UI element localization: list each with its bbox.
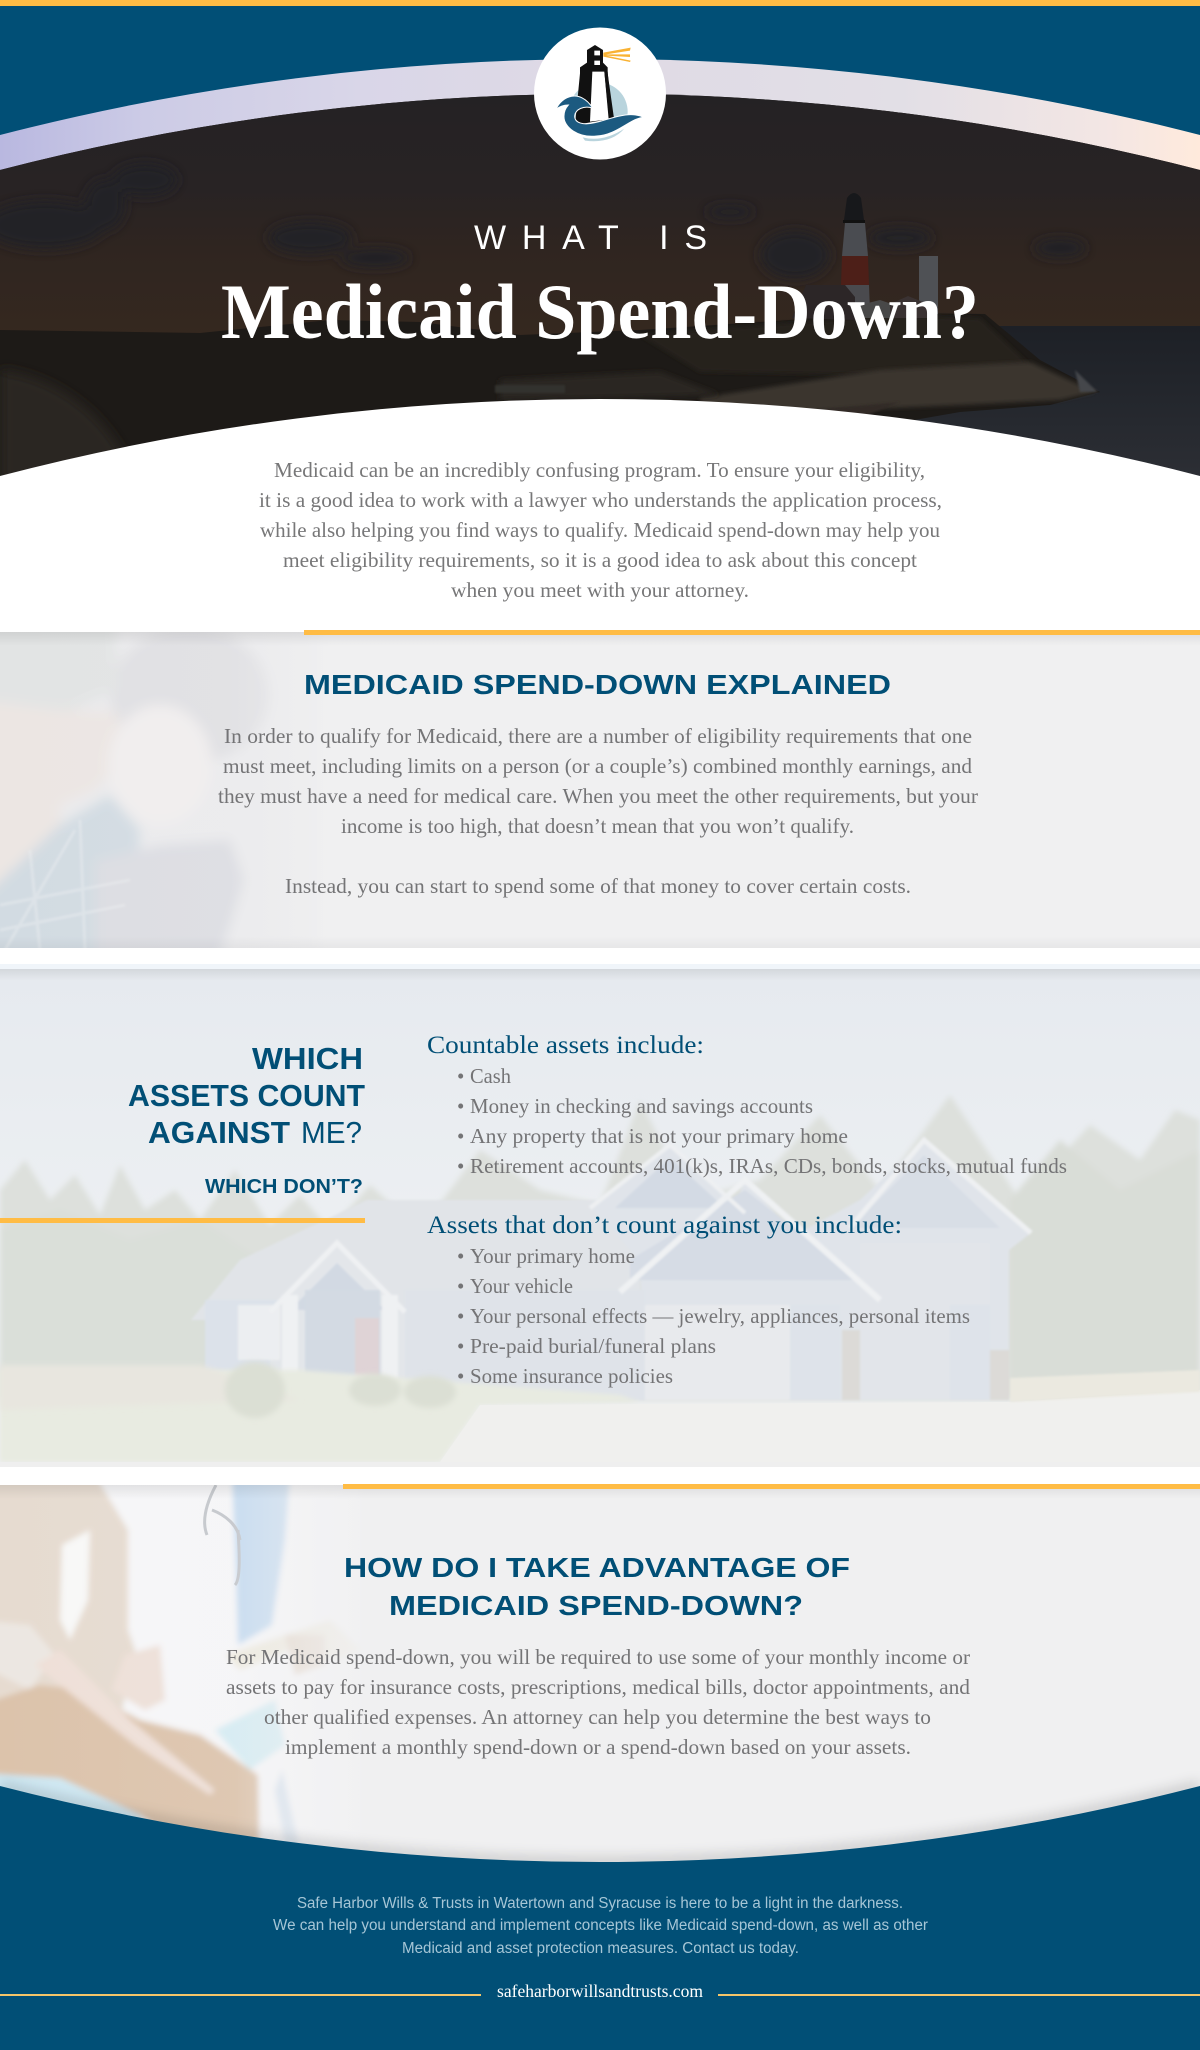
heading: which assets count: ASSETS COUNT xyxy=(128,1078,365,1113)
shrubs xyxy=(225,1362,456,1418)
list: countable assets: Any property that is not your primary home xyxy=(470,1124,848,1148)
kicker: what is: WHAT IS xyxy=(474,219,707,257)
panel: how to take advantage xyxy=(0,1475,1200,1895)
closing text: Medicaid and asset protection measures. Contact us today. xyxy=(402,1940,799,1957)
body text: other qualified expenses. An attorney can help you determine the best ways to xyxy=(264,1705,931,1729)
main title: Medicaid Spend-Down? xyxy=(221,268,979,355)
body text xyxy=(226,1645,971,1759)
heading xyxy=(344,1552,850,1621)
sea xyxy=(915,326,1200,476)
heading: MEDICAID SPEND-DOWN? xyxy=(389,1590,803,1621)
stethoscope xyxy=(205,1485,240,1585)
header photo: lighthouse at dusk xyxy=(0,90,1200,500)
house xyxy=(191,1140,1031,1400)
closing text xyxy=(273,1895,928,1957)
shore foam xyxy=(1075,370,1098,392)
rocks xyxy=(700,362,1095,415)
list: non-countable assets: • xyxy=(457,1244,464,1268)
intro text block: while also helping you find ways to qualify. Medicaid spend-down may help you xyxy=(260,518,940,542)
accent bar xyxy=(304,630,1200,635)
closing text: Safe Harbor Wills & Trusts in Watertown and Syracuse is here to be a light in the darkness. xyxy=(297,1895,903,1912)
list: countable assets: Retirement accounts, 401(k)s, IRAs, CDs, bonds, stocks, mutual funds xyxy=(470,1154,1067,1178)
list: non-countable assets: • xyxy=(457,1304,464,1328)
intro text block xyxy=(259,458,942,602)
body text: income is too high, that doesn’t mean that you won’t qualify. xyxy=(341,814,854,838)
scrub bush xyxy=(0,373,118,476)
body text xyxy=(218,724,978,898)
list: non-countable assets xyxy=(427,1212,970,1388)
footer xyxy=(0,1786,1200,2050)
clouds xyxy=(0,181,1080,280)
list: countable assets: • xyxy=(457,1154,464,1178)
logo badge xyxy=(534,28,666,160)
list: non-countable assets: Pre-paid burial/funeral plans xyxy=(470,1334,716,1358)
list: countable assets: Money in checking and savings accounts xyxy=(470,1094,813,1118)
list: non-countable assets: • xyxy=(457,1364,464,1388)
body text: must meet, including limits on a person (or a couple’s) combined monthly earnings, and xyxy=(223,754,973,778)
body text: assets to pay for insurance costs, prescriptions, medical bills, doctor appointments, and xyxy=(226,1675,971,1699)
header background xyxy=(0,0,1200,640)
panel: spend-down explained xyxy=(0,620,1200,970)
intro text block: Medicaid can be an incredibly confusing program. To ensure your eligibility, xyxy=(274,458,925,482)
list: countable assets xyxy=(427,1032,1067,1178)
heading: MEDICAID SPEND-DOWN EXPLAINED xyxy=(304,669,891,700)
tree line xyxy=(0,1095,1200,1400)
list: countable assets: • xyxy=(457,1064,464,1088)
icon: lighthouse and wave xyxy=(556,45,644,141)
list: non-countable assets: Your personal effects — jewelry, appliances, personal items xyxy=(470,1304,970,1328)
land xyxy=(0,314,1100,420)
accent bar xyxy=(343,1484,1200,1489)
list: non-countable assets: • xyxy=(457,1274,464,1298)
body text: Instead, you can start to spend some of that money to cover certain costs. xyxy=(285,874,911,898)
grass on point xyxy=(647,318,1021,373)
website line: safeharborwillsandtrusts.com xyxy=(497,1981,703,2001)
light arc band xyxy=(0,59,1200,200)
white arc xyxy=(0,399,1200,640)
heading: which assets count: WHICH DON’T? xyxy=(205,1176,363,1198)
closing text: We can help you understand and implement concepts like Medicaid spend-down, as well as other xyxy=(273,1917,928,1934)
heading: which assets count xyxy=(128,1041,365,1198)
title xyxy=(221,219,979,355)
lighthouse tower xyxy=(792,193,938,320)
list: non-countable assets: Your primary home xyxy=(470,1244,635,1268)
heading: which assets count: AGAINST xyxy=(148,1115,290,1150)
list: non-countable assets: Assets that don’t count against you include: xyxy=(427,1212,902,1239)
accent bar xyxy=(0,1218,365,1223)
body text: implement a monthly spend-down or a spend-down based on your assets. xyxy=(285,1735,911,1759)
list: non-countable assets: Your vehicle xyxy=(470,1274,573,1298)
photo: patient with doctor xyxy=(0,1485,327,1842)
heading: HOW DO I TAKE ADVANTAGE OF xyxy=(344,1552,850,1583)
photo: elderly couple xyxy=(0,632,266,948)
body text: In order to qualify for Medicaid, there are a number of eligibility requirements that one xyxy=(224,724,972,748)
ground xyxy=(0,1370,640,1462)
list: non-countable assets: Some insurance policies xyxy=(470,1364,673,1388)
list: countable assets: Cash xyxy=(470,1064,511,1088)
panel: which assets count xyxy=(0,964,1200,1467)
photo: suburban house xyxy=(0,969,1200,1462)
intro text block: when you meet with your attorney. xyxy=(451,578,749,602)
heading: which assets count: ME? xyxy=(301,1115,362,1150)
shirt plaid xyxy=(2,822,92,948)
list: countable assets: Countable assets include: xyxy=(427,1032,704,1059)
list: countable assets: • xyxy=(457,1094,464,1118)
body text: they must have a need for medical care. When you meet the other requirements, but your xyxy=(218,784,978,808)
list: non-countable assets: • xyxy=(457,1334,464,1358)
list: countable assets: • xyxy=(457,1124,464,1148)
heading: which assets count: WHICH xyxy=(252,1041,363,1076)
intro text block: it is a good idea to work with a lawyer who understands the application process, xyxy=(259,488,942,512)
body text: For Medicaid spend-down, you will be required to use some of your monthly income or xyxy=(226,1645,970,1669)
parking lot xyxy=(500,372,720,400)
beach xyxy=(839,404,892,414)
intro text block: meet eligibility requirements, so it is a good idea to ask about this concept xyxy=(283,548,917,572)
